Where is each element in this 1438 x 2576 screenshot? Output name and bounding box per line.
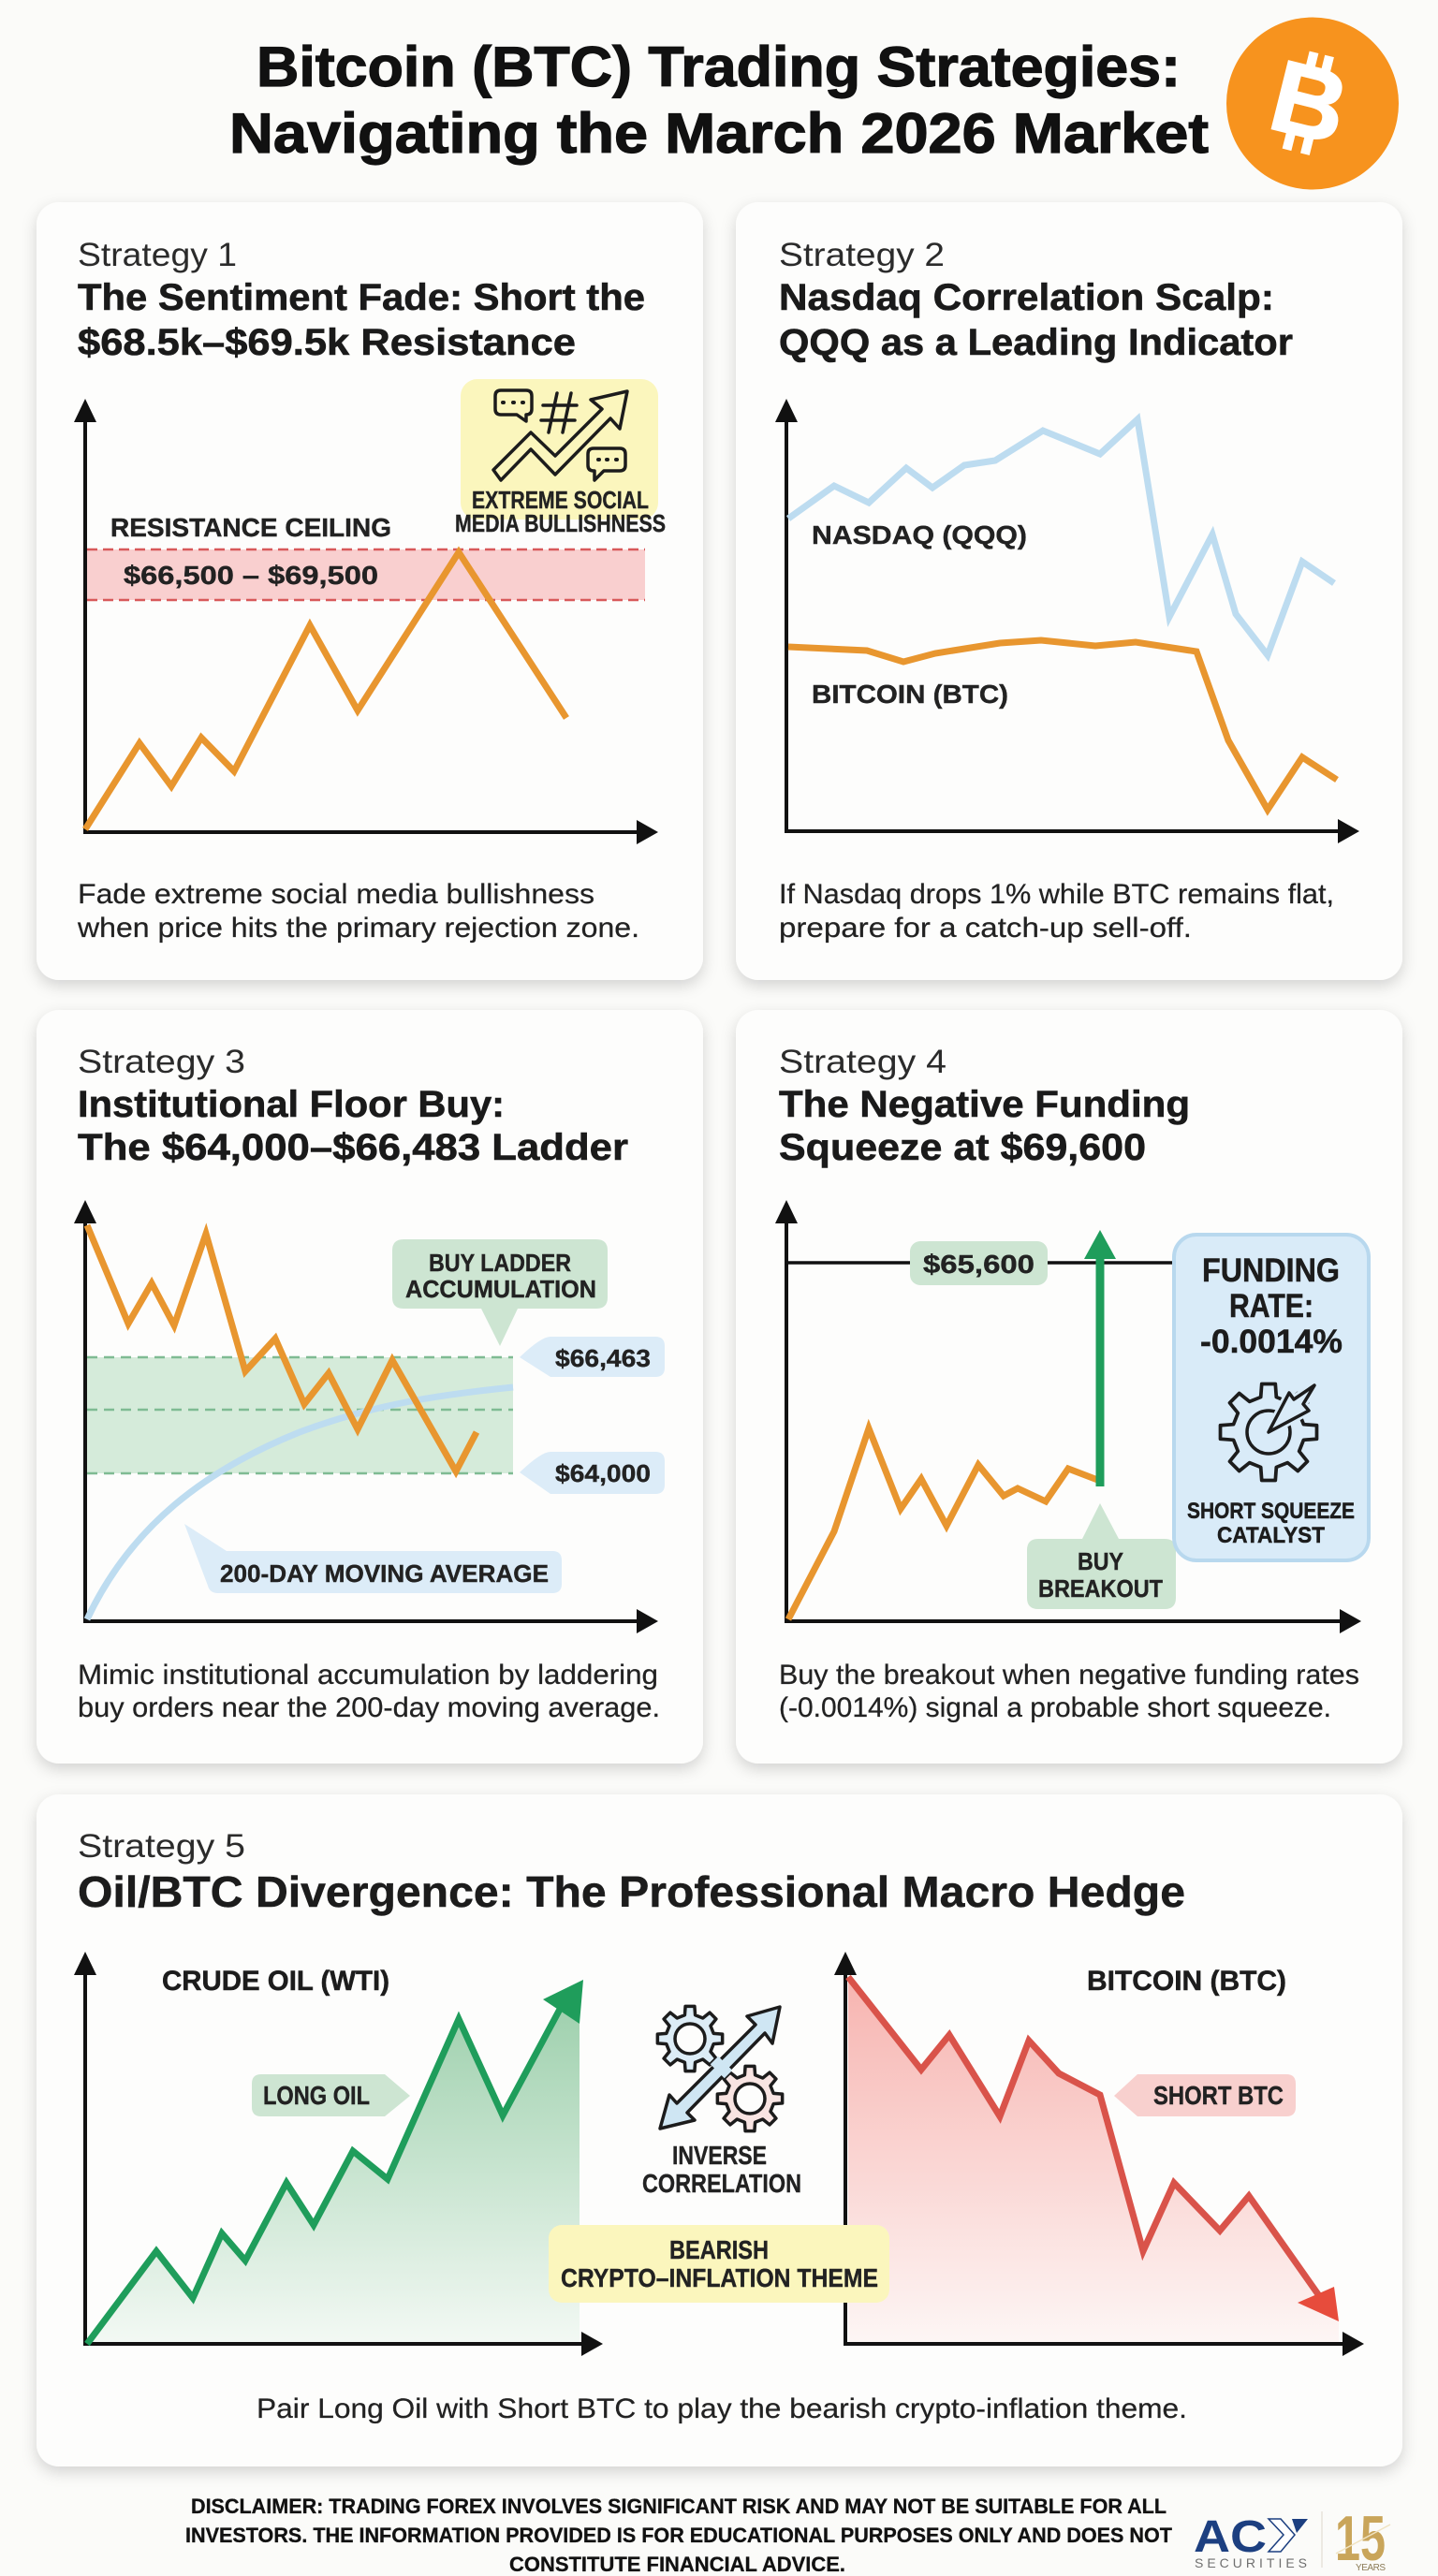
heading: $68.5k–$69.5k Resistance <box>78 322 576 363</box>
callout: extreme social media bullishness <box>455 379 666 537</box>
callout: long oil: LONG OIL <box>263 2081 370 2110</box>
axes <box>775 1200 1361 1633</box>
heading: Institutional Floor Buy: <box>78 1084 505 1125</box>
callout: buy ladder accumulation: ACCUMULATION <box>405 1275 596 1303</box>
heading: QQQ as a Leading Indicator <box>779 322 1293 363</box>
description <box>779 1660 1359 1723</box>
label: resistance ceiling: RESISTANCE CEILING <box>110 513 391 542</box>
heading: Squeeze at $69,600 <box>779 1127 1146 1168</box>
description: buy orders near the 200-day moving average. <box>78 1692 660 1723</box>
catalyst text: CATALYST <box>1217 1523 1325 1548</box>
logo: 15 years <box>1322 2503 1390 2574</box>
funding rate value: -0.0014% <box>1200 1324 1343 1360</box>
bitcoin line <box>788 640 1337 810</box>
panel: strategy 1 <box>37 202 703 980</box>
heading <box>779 1084 1190 1168</box>
label: crude oil: CRUDE OIL (WTI) <box>162 1966 389 1997</box>
disclaimer: INVESTORS. THE INFORMATION PROVIDED IS FOR EDUCATIONAL PURPOSES ONLY AND DOES NOT <box>185 2524 1173 2547</box>
panel: strategy 2 <box>736 202 1402 980</box>
heading: The $64,000–$66,483 Ladder <box>78 1127 628 1168</box>
icon: bitcoin logo: B <box>1260 38 1358 166</box>
callout: 200-day moving average <box>184 1524 562 1593</box>
area fill <box>87 2002 580 2344</box>
funding rate value: RATE: <box>1229 1288 1313 1325</box>
axes <box>74 1200 658 1633</box>
callout: upper price <box>520 1337 665 1377</box>
logo: 15 years: 15 <box>1335 2503 1386 2574</box>
callout: long oil <box>252 2074 410 2116</box>
heading: The Negative Funding <box>779 1084 1190 1125</box>
label: price level: $65,600 <box>923 1250 1034 1279</box>
label: nasdaq: NASDAQ (QQQ) <box>812 520 1027 549</box>
description: when price hits the primary rejection zone. <box>77 913 639 944</box>
description: Mimic institutional accumulation by laddering <box>78 1660 658 1690</box>
price line <box>87 1225 477 1471</box>
icon: gear with arrow <box>1221 1384 1316 1480</box>
resistance band <box>87 549 645 600</box>
description: prepare for a catch-up sell-off. <box>779 913 1192 944</box>
callout: funding rate <box>1174 1235 1369 1560</box>
disclaimer <box>185 2495 1173 2576</box>
accumulation band <box>87 1357 513 1473</box>
axes <box>834 1952 1364 2356</box>
nasdaq line <box>788 419 1334 655</box>
heading: The Sentiment Fade: Short the <box>78 277 645 318</box>
logo: ACY Securities: AC <box>1194 2512 1267 2562</box>
callout: short btc <box>1114 2074 1296 2116</box>
chart: bitcoin <box>834 1952 1364 2356</box>
description <box>78 1660 660 1723</box>
chart: buy ladder <box>74 1200 665 1633</box>
heading: Nasdaq Correlation Scalp: <box>779 277 1274 318</box>
callout: lower price <box>520 1452 665 1494</box>
heading <box>78 277 645 363</box>
title <box>229 36 1209 165</box>
callout: buy ladder accumulation <box>392 1239 608 1346</box>
oil price line <box>87 1980 583 2344</box>
catalyst text <box>1187 1499 1355 1548</box>
panel: strategy 4 <box>736 1010 1402 1764</box>
funding rate value: FUNDING <box>1202 1252 1340 1289</box>
icon: inverse correlation gears and arrows <box>657 2006 783 2131</box>
callout: bearish crypto-inflation theme: BEARISH <box>669 2235 769 2264</box>
callout: lower price: $64,000 <box>555 1459 651 1487</box>
description <box>779 879 1334 944</box>
panel: strategy 5 <box>37 1794 1402 2466</box>
label: strategy number: Strategy 5 <box>78 1828 245 1865</box>
description: If Nasdaq drops 1% while BTC remains flat, <box>779 879 1334 910</box>
label: inverse correlation: CORRELATION <box>642 2169 801 2198</box>
bitcoin price line <box>848 1977 1339 2321</box>
panel: strategy 3 <box>37 1010 703 1764</box>
label: price level <box>910 1241 1048 1285</box>
label: inverse correlation: INVERSE <box>672 2141 767 2170</box>
callout: buy ladder accumulation: BUY LADDER <box>429 1249 571 1277</box>
disclaimer: CONSTITUTE FINANCIAL ADVICE. <box>509 2553 845 2576</box>
label: strategy number: Strategy 4 <box>779 1044 946 1080</box>
label: price range: $66,500 – $69,500 <box>124 561 378 590</box>
description: Pair Long Oil with Short BTC to play the bearish crypto-inflation theme. <box>257 2393 1187 2424</box>
disclaimer: DISCLAIMER: TRADING FOREX INVOLVES SIGNIFICANT RISK AND MAY NOT BE SUITABLE FOR ALL <box>191 2495 1167 2518</box>
description: (-0.0014%) signal a probable short squeeze. <box>779 1692 1331 1723</box>
callout: upper price: $66,463 <box>555 1344 651 1372</box>
funding rate value <box>1200 1252 1343 1360</box>
200-day moving average curve <box>87 1387 513 1619</box>
callout: buy breakout: BREAKOUT <box>1038 1574 1163 1603</box>
label: inverse correlation <box>642 2141 801 2198</box>
label: strategy number: Strategy 1 <box>78 237 237 273</box>
label: bitcoin: BITCOIN (BTC) <box>812 680 1008 709</box>
heading: Oil/BTC Divergence: The Professional Macro Hedge <box>78 1867 1185 1916</box>
chart: resistance rejection <box>74 399 658 844</box>
chart: breakout <box>775 1200 1361 1633</box>
callout: buy breakout: BUY <box>1078 1547 1123 1575</box>
logo: ACY Securities <box>1194 2512 1308 2570</box>
title: Navigating the March 2026 Market <box>229 102 1209 165</box>
logo: 15 years: YEARS <box>1356 2563 1386 2573</box>
callout: bearish crypto-inflation theme <box>549 2225 889 2303</box>
title: Bitcoin (BTC) Trading Strategies: <box>257 36 1181 98</box>
callout text: MEDIA BULLISHNESS <box>455 509 666 537</box>
label: strategy number: Strategy 3 <box>78 1044 245 1080</box>
description <box>77 879 639 944</box>
logo: ACY Securities: SECURITIES <box>1195 2555 1307 2570</box>
description: Fade extreme social media bullishness <box>78 879 594 910</box>
price line <box>788 1428 1100 1619</box>
callout: buy breakout <box>1027 1503 1176 1609</box>
callout: bearish crypto-inflation theme: CRYPTO–INFLATION THEME <box>561 2263 878 2292</box>
callout: 200-day moving average: 200-DAY MOVING AVERAGE <box>220 1559 549 1588</box>
catalyst text: SHORT SQUEEZE <box>1187 1499 1355 1524</box>
heading <box>78 1084 628 1168</box>
axes <box>74 1952 603 2356</box>
axes <box>74 399 658 844</box>
callout text: EXTREME SOCIAL <box>472 486 649 514</box>
breakout level line <box>786 1261 1176 1265</box>
heading <box>779 277 1293 363</box>
icon: bitcoin logo <box>1226 17 1399 189</box>
callout: short btc: SHORT BTC <box>1153 2081 1284 2110</box>
chart: crude oil <box>74 1952 603 2356</box>
axes <box>775 399 1359 843</box>
arrow: breakout <box>1084 1230 1116 1486</box>
label: strategy number: Strategy 2 <box>779 237 945 273</box>
description: Buy the breakout when negative funding rates <box>779 1660 1359 1690</box>
icon: social trend arrow <box>493 390 627 480</box>
chart: nasdaq vs bitcoin <box>775 399 1359 843</box>
callout text <box>455 486 666 537</box>
area fill <box>848 1977 1339 2344</box>
label: bitcoin: BITCOIN (BTC) <box>1087 1966 1286 1997</box>
price line <box>85 552 566 829</box>
